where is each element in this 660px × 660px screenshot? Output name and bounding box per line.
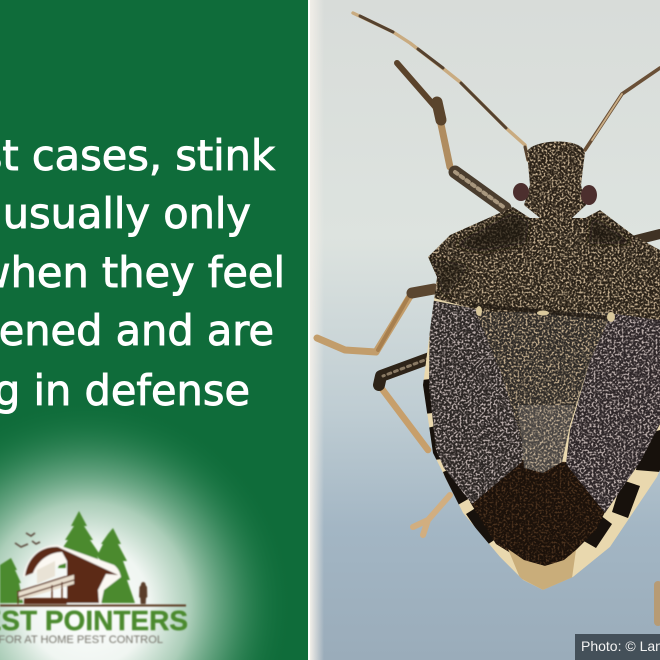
panel: green message panel xyxy=(0,0,308,660)
left wing xyxy=(429,300,526,504)
right wing xyxy=(566,300,660,513)
scutellum xyxy=(476,312,612,473)
icon: pine trees xyxy=(0,511,135,603)
legs xyxy=(317,63,660,622)
pale spots xyxy=(476,306,615,322)
photo credit xyxy=(575,634,660,660)
message text xyxy=(0,131,285,415)
abdomen margin xyxy=(423,207,660,590)
icon: left eye xyxy=(513,183,529,201)
bug head xyxy=(513,141,597,218)
icon: house xyxy=(17,545,121,604)
icon: person xyxy=(139,582,147,604)
bug body xyxy=(422,207,660,590)
icon: birds xyxy=(15,533,40,547)
icon: right eye xyxy=(581,185,597,205)
dark pronotum front xyxy=(452,212,530,252)
antennae xyxy=(353,13,660,160)
scutellum tip highlight xyxy=(517,405,574,473)
margin bands xyxy=(422,378,660,548)
pronotum groove xyxy=(472,305,610,318)
panel: stink bug photo xyxy=(310,0,660,660)
ground line xyxy=(0,604,186,606)
pronotum xyxy=(428,207,660,320)
membrane xyxy=(470,460,606,566)
logo: Pest Pointers xyxy=(0,511,188,646)
